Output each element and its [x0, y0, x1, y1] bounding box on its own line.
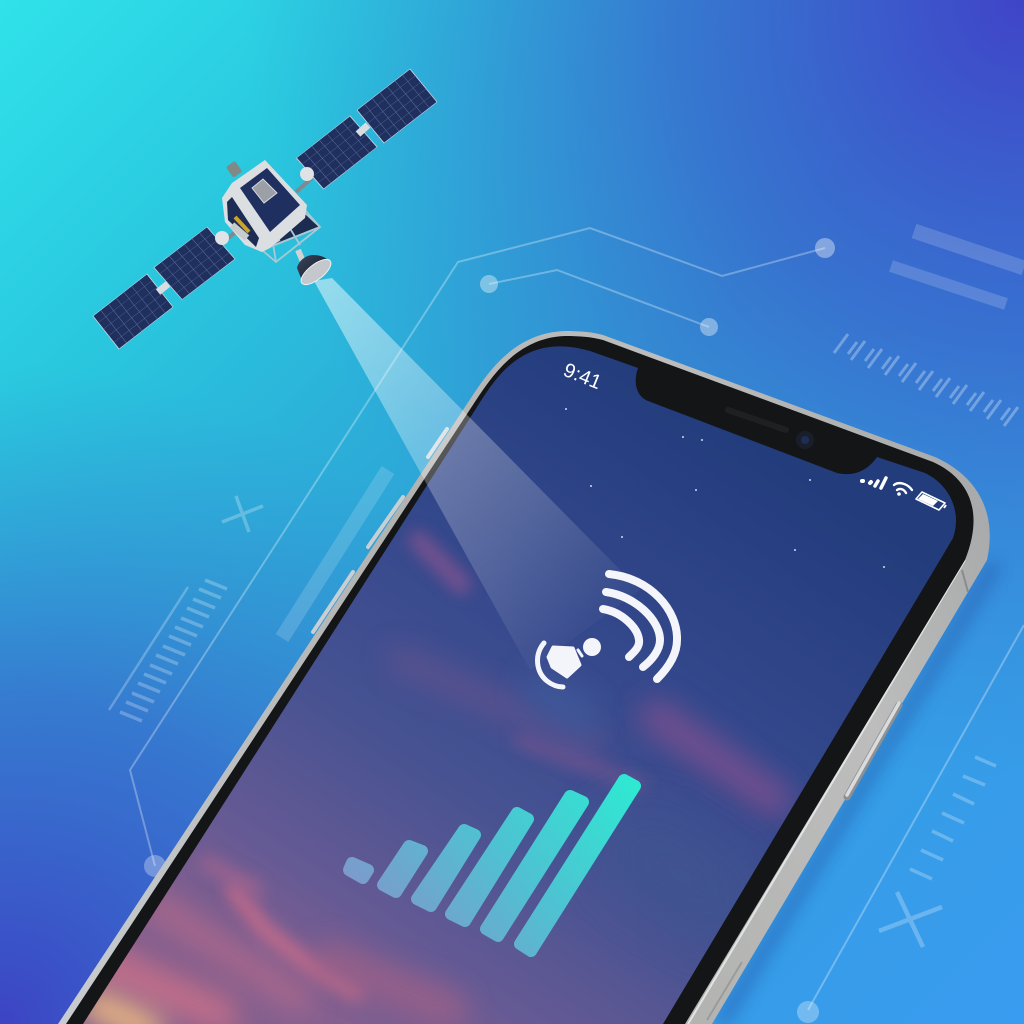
right side button: [847, 705, 899, 797]
lower right connector line with node: [797, 625, 1024, 1023]
lower right x mark: [879, 892, 942, 947]
satellite: [93, 69, 437, 349]
lower right side slot: [707, 962, 742, 1020]
panel connectors and joints: [158, 125, 368, 292]
side button left top: [428, 429, 447, 457]
dish body: [548, 647, 580, 677]
phone silver frame: [58, 331, 990, 1024]
bar 1: [349, 863, 368, 878]
phone screen: [83, 346, 956, 1024]
dish: [297, 255, 330, 283]
lower frame with struts: [262, 210, 320, 262]
dish rim: [297, 255, 335, 289]
dish neck: [578, 650, 582, 656]
signal waves: [609, 574, 677, 679]
cell signal status icon: [862, 478, 886, 488]
side button left lower: [313, 572, 353, 632]
bar 5: [486, 796, 583, 936]
front navy face: [240, 168, 300, 232]
gold component: [232, 217, 249, 238]
left vertical light bar: [282, 470, 388, 638]
solar panel near left: [154, 227, 235, 300]
phone: [58, 331, 1001, 1024]
satellite body silhouette: [222, 160, 307, 252]
front camera: [796, 431, 814, 449]
antenna feed: [297, 250, 335, 289]
bar 3: [417, 830, 475, 906]
phone black bezel: [66, 336, 974, 1024]
solar panel near right: [296, 116, 377, 189]
inner connector line with nodes: [480, 270, 718, 336]
clock text: 9:41: [560, 359, 604, 394]
battery status icon: [916, 492, 946, 510]
solar panel far right: [357, 69, 437, 143]
satellite knob: [226, 161, 242, 178]
stars: [565, 408, 885, 568]
upper connector line with node: [130, 228, 835, 877]
right side inner highlight: [688, 560, 965, 1024]
center chip: [252, 179, 277, 203]
phone drop shadow: [712, 560, 1002, 1024]
dish arc: [538, 643, 563, 687]
bar 4: [451, 813, 528, 921]
right tick scale: [910, 757, 996, 879]
notch speaker: [728, 410, 786, 430]
bar 2: [383, 846, 422, 892]
satellite connection icon: [538, 574, 677, 687]
dish feed dot: [583, 638, 601, 656]
top right bars: [891, 231, 1024, 304]
left x mark: [222, 496, 263, 532]
light beam from satellite to phone: [314, 278, 640, 670]
bar 6: [520, 780, 635, 951]
sunset clouds: [95, 540, 775, 1024]
left tick scale: [109, 580, 227, 721]
side button left middle: [368, 497, 403, 547]
signal bars: [349, 780, 635, 951]
wifi status icon: [894, 483, 912, 496]
side navy panel: [227, 197, 259, 247]
top right tick scale: [834, 334, 1018, 426]
right antenna band: [962, 570, 968, 592]
solar panel far left: [93, 274, 173, 349]
decorative circuit lines and tech marks: [109, 228, 1024, 1023]
